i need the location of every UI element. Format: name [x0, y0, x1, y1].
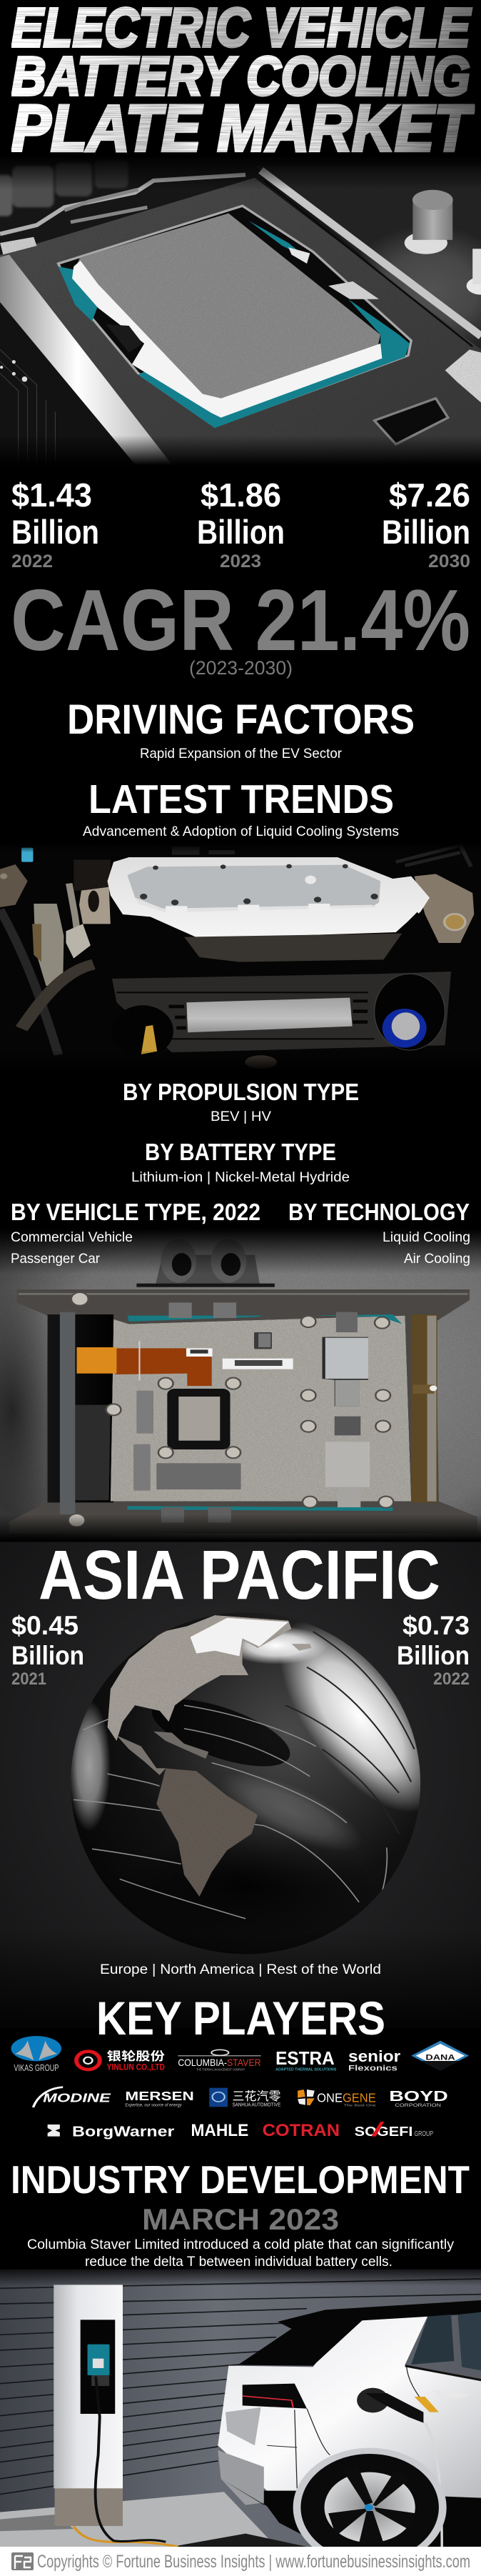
logo: Boyd: BOYD [389, 2088, 448, 2105]
stat: 2030 value: 2030 [428, 551, 470, 571]
stat: 2022 regional value: $0.73 [402, 1611, 470, 1640]
stat: 2023 value: $1.86 [201, 476, 281, 514]
logo: Onegene [298, 2090, 376, 2107]
logo: Modine: MODINE [43, 2091, 111, 2105]
logo: Vikas Group [11, 2036, 61, 2073]
icon: Fortune Business Insights logo [11, 2552, 34, 2570]
latest trends text: Advancement & Adoption of Liquid Cooling Systems [83, 824, 399, 839]
image: battery cooling plate on concrete [0, 1229, 481, 1541]
footer [0, 2547, 481, 2576]
segment: by propulsion type [123, 1079, 359, 1124]
driving factors text: Rapid Expansion of the EV Sector [140, 746, 342, 762]
stat: 2023 value [197, 476, 285, 571]
segment: by vehicle type: Commercial Vehicle [11, 1229, 133, 1245]
heading: driving factors: DRIVING FACTORS [67, 697, 415, 743]
logo: BorgWarner: BorgWarner [72, 2123, 174, 2140]
stat: 2030 value [382, 476, 470, 571]
logo: Estra [275, 2048, 336, 2072]
development text: Columbia Staver Limited introduced a cold plate that can significantly [27, 2237, 454, 2252]
development date: MARCH 2023 [142, 2202, 339, 2236]
segment: by technology: Air Cooling [404, 1251, 470, 1267]
other regions: Europe | North America | Rest of the World [100, 1962, 381, 1977]
segment: by vehicle type: BY VEHICLE TYPE, 2022 [11, 1199, 260, 1225]
logo: Yinlun [76, 2050, 165, 2072]
stat: 2023 value: Billion [197, 513, 285, 551]
logo: Boyd: CORPORATION [395, 2102, 441, 2108]
image: car engine bay [0, 843, 481, 1072]
segment: by battery type [131, 1139, 350, 1185]
stat: 2022 regional value: 2022 [433, 1669, 470, 1689]
segment: by propulsion type: BEV | HV [211, 1109, 271, 1124]
stat: 2021 regional value: Billion [11, 1641, 84, 1670]
logo: Yinlun: 银轮股份 [107, 2050, 165, 2063]
stat: 2022 value: 2022 [11, 551, 53, 571]
segment: by propulsion type: BY PROPULSION TYPE [123, 1079, 359, 1105]
stat: 2022 value [11, 476, 99, 571]
logo: Sanhua: SANHUA AUTOMOTIVE [233, 2102, 281, 2107]
logo: Dana: DANA [425, 2052, 455, 2062]
stat: 2021 regional value: $0.45 [11, 1611, 79, 1640]
logo: Modine [33, 2087, 111, 2107]
heading: key players: KEY PLAYERS [96, 1992, 385, 2045]
logo: Senior Flexonics: senior [348, 2048, 400, 2065]
stat: 2022 value: Billion [11, 513, 99, 551]
segment: by technology: Liquid Cooling [383, 1229, 470, 1245]
CAGR period: (2023-2030) [189, 657, 293, 679]
segment: by technology [288, 1199, 470, 1267]
segment: by battery type: BY BATTERY TYPE [145, 1139, 336, 1165]
stat: 2021 regional value [11, 1611, 84, 1689]
stat: 2022 value: $1.43 [11, 476, 92, 514]
logo: Mersen: Expertise, our source of energy [125, 2103, 182, 2107]
heading: asia pacific: ASIA PACIFIC [39, 1536, 440, 1614]
segment: by vehicle type [11, 1199, 260, 1267]
stat: 2021 regional value: 2021 [11, 1669, 46, 1689]
logo: Sanhua: 三花汽零 [233, 2090, 280, 2103]
logo: Sogefi: SOGEFI [355, 2125, 412, 2139]
image: cooling plate on circuit board [0, 154, 481, 465]
image: metallic globe [0, 1542, 481, 2028]
stat: 2022 regional value: Billion [397, 1641, 470, 1670]
logo: Onegene: The Best One [344, 2104, 376, 2107]
logo: Estra: ADAPTED THERMAL SOLUTIONS [275, 2067, 336, 2072]
logo: Yinlun: YINLUN CO.,LTD [107, 2062, 165, 2072]
company logos [11, 2036, 469, 2140]
logo: Sanhua [209, 2088, 281, 2107]
logo: Mersen: MERSEN [125, 2089, 194, 2103]
title [11, 0, 475, 165]
segment: by battery type: Lithium-ion | Nickel-Metal Hydride [131, 1169, 350, 1185]
logo: Onegene: ONEGENE [317, 2092, 376, 2105]
logo: Senior Flexonics [348, 2048, 400, 2072]
logo: Columbia Staver: THE THERMAL MANAGEMENT COMPANY [196, 2068, 245, 2072]
logo: Columbia Staver [178, 2050, 261, 2072]
stat: 2023 value: 2023 [220, 551, 261, 571]
logo: Mahle: MAHLE [191, 2120, 248, 2140]
segment: by vehicle type: Passenger Car [11, 1251, 100, 1267]
logo: Estra: ESTRA [275, 2048, 335, 2069]
heading: latest trends: LATEST TRENDS [88, 777, 394, 822]
logo: Senior Flexonics: Flexonics [348, 2064, 398, 2072]
development text [27, 2237, 454, 2270]
logo: Columbia Staver: COLUMBIA-STAVER [178, 2057, 260, 2068]
logo: Vikas Group: VIKAS GROUP [14, 2064, 59, 2073]
development text: reduce the delta T between individual battery cells. [85, 2254, 393, 2270]
logo: Sogefi: GROUP [415, 2130, 433, 2138]
logo: Cotran: COTRAN [263, 2120, 340, 2140]
image: electric car charging [0, 2265, 481, 2567]
stat: 2022 regional value [397, 1611, 470, 1689]
stat: 2030 value: $7.26 [389, 476, 470, 514]
logo: Dana [411, 2041, 469, 2070]
